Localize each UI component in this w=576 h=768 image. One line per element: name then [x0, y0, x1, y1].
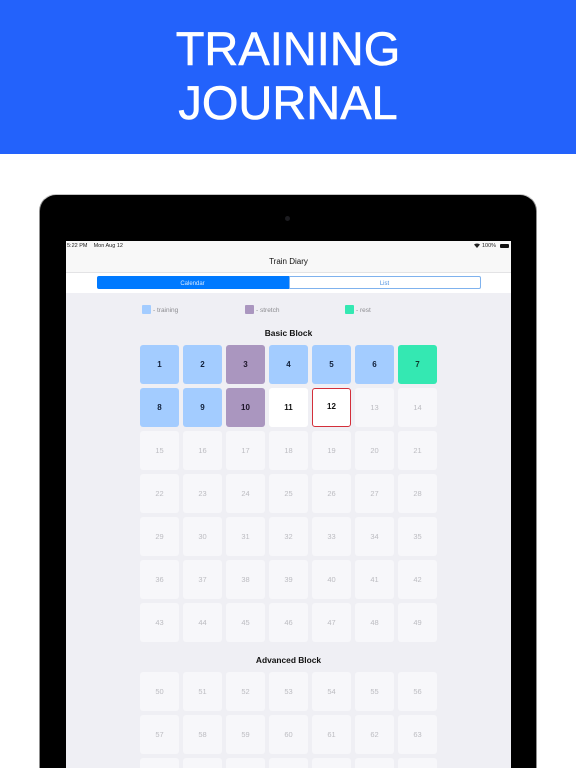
- heading: advanced block: Advanced Block: [256, 655, 321, 665]
- advanced block grid: 60: [284, 730, 293, 739]
- basic block grid: 6: [372, 360, 377, 369]
- basic block grid: 41: [370, 575, 379, 584]
- basic block grid: 13: [370, 403, 379, 412]
- icon: wifi: [474, 244, 480, 248]
- basic block grid: 30: [198, 532, 207, 541]
- basic block grid: 18: [284, 446, 293, 455]
- title: [176, 22, 400, 129]
- basic block grid: 9: [200, 403, 205, 412]
- icon: camera: [285, 216, 290, 221]
- advanced block grid: 57: [155, 730, 164, 739]
- basic block grid: 35: [413, 532, 422, 541]
- basic block grid: 44: [198, 618, 207, 627]
- status bar time: 5:22 PM Mon Aug 12: [67, 243, 123, 249]
- segmented control area: [66, 273, 511, 293]
- advanced block grid: 50: [155, 687, 164, 696]
- tab: list: [288, 276, 480, 289]
- basic block grid: 12: [327, 402, 336, 411]
- basic block grid: 14: [413, 403, 422, 412]
- icon: battery: [500, 244, 509, 248]
- basic block grid: 46: [284, 618, 293, 627]
- basic block grid: 43: [155, 618, 164, 627]
- tablet screen: [66, 241, 511, 768]
- basic block grid: 47: [327, 618, 336, 627]
- tab: list: List: [380, 281, 389, 287]
- basic block grid: 3: [243, 360, 248, 369]
- basic block grid: 15: [155, 446, 164, 455]
- basic block grid: 2: [200, 360, 205, 369]
- legend: [142, 305, 371, 314]
- title banner: [0, 0, 576, 154]
- basic block grid: 28: [413, 489, 422, 498]
- tab: calendar: Calendar: [180, 281, 205, 287]
- basic block grid: 36: [155, 575, 164, 584]
- tablet device: [39, 194, 537, 768]
- basic block grid: 40: [327, 575, 336, 584]
- advanced block grid: 53: [284, 687, 293, 696]
- basic block grid: 24: [241, 489, 250, 498]
- basic block grid: 34: [370, 532, 379, 541]
- legend: training: - training: [153, 307, 178, 314]
- basic block grid: 1: [157, 360, 162, 369]
- basic block grid: 29: [155, 532, 164, 541]
- heading: basic block: Basic Block: [265, 328, 312, 338]
- app title: Train Diary: [269, 257, 308, 266]
- advanced block grid: 58: [198, 730, 207, 739]
- basic block grid: 16: [198, 446, 207, 455]
- basic block grid: 7: [415, 360, 420, 369]
- basic block grid: 33: [327, 532, 336, 541]
- advanced block grid: 62: [370, 730, 379, 739]
- basic block grid: 20: [370, 446, 379, 455]
- legend: stretch: [245, 305, 280, 314]
- basic block grid: 32: [284, 532, 293, 541]
- basic block grid: 8: [157, 403, 162, 412]
- advanced block grid: 55: [370, 687, 379, 696]
- advanced block grid: 54: [327, 687, 336, 696]
- advanced block grid: 51: [198, 687, 207, 696]
- basic block grid: 11: [284, 403, 293, 412]
- basic block grid: 26: [327, 489, 336, 498]
- advanced block grid: 63: [413, 730, 422, 739]
- legend: training: [142, 305, 178, 314]
- basic block grid: 31: [241, 532, 250, 541]
- legend: stretch: - stretch: [256, 307, 279, 314]
- basic block grid: [140, 345, 437, 627]
- basic block grid: 22: [155, 489, 164, 498]
- basic block grid: 4: [286, 360, 291, 369]
- basic block grid: 48: [370, 618, 379, 627]
- advanced block grid: 52: [241, 687, 250, 696]
- navigation header: [66, 241, 511, 273]
- advanced block grid: 56: [413, 687, 422, 696]
- basic block grid: 45: [241, 618, 250, 627]
- basic block grid: 39: [284, 575, 293, 584]
- basic block grid: 38: [241, 575, 250, 584]
- legend: rest: [345, 305, 371, 314]
- basic block grid: 25: [284, 489, 293, 498]
- tab: calendar: [96, 276, 288, 289]
- basic block grid: 5: [329, 360, 334, 369]
- status bar battery: [474, 243, 509, 249]
- advanced block grid: [155, 687, 422, 739]
- basic block grid: 19: [327, 446, 336, 455]
- advanced block grid: 59: [241, 730, 250, 739]
- battery percentage: 100%: [482, 243, 496, 249]
- advanced block grid: 61: [327, 730, 336, 739]
- basic block grid: 17: [241, 446, 250, 455]
- legend: rest: - rest: [356, 307, 371, 314]
- basic block grid: 37: [198, 575, 207, 584]
- basic block grid: 10: [241, 403, 250, 412]
- basic block grid: 49: [413, 618, 422, 627]
- basic block grid: 27: [370, 489, 379, 498]
- title: JOURNAL: [178, 76, 398, 129]
- basic block grid: 23: [198, 489, 207, 498]
- title: TRAINING: [176, 22, 400, 75]
- basic block grid: 42: [413, 575, 422, 584]
- basic block grid: 21: [413, 446, 422, 455]
